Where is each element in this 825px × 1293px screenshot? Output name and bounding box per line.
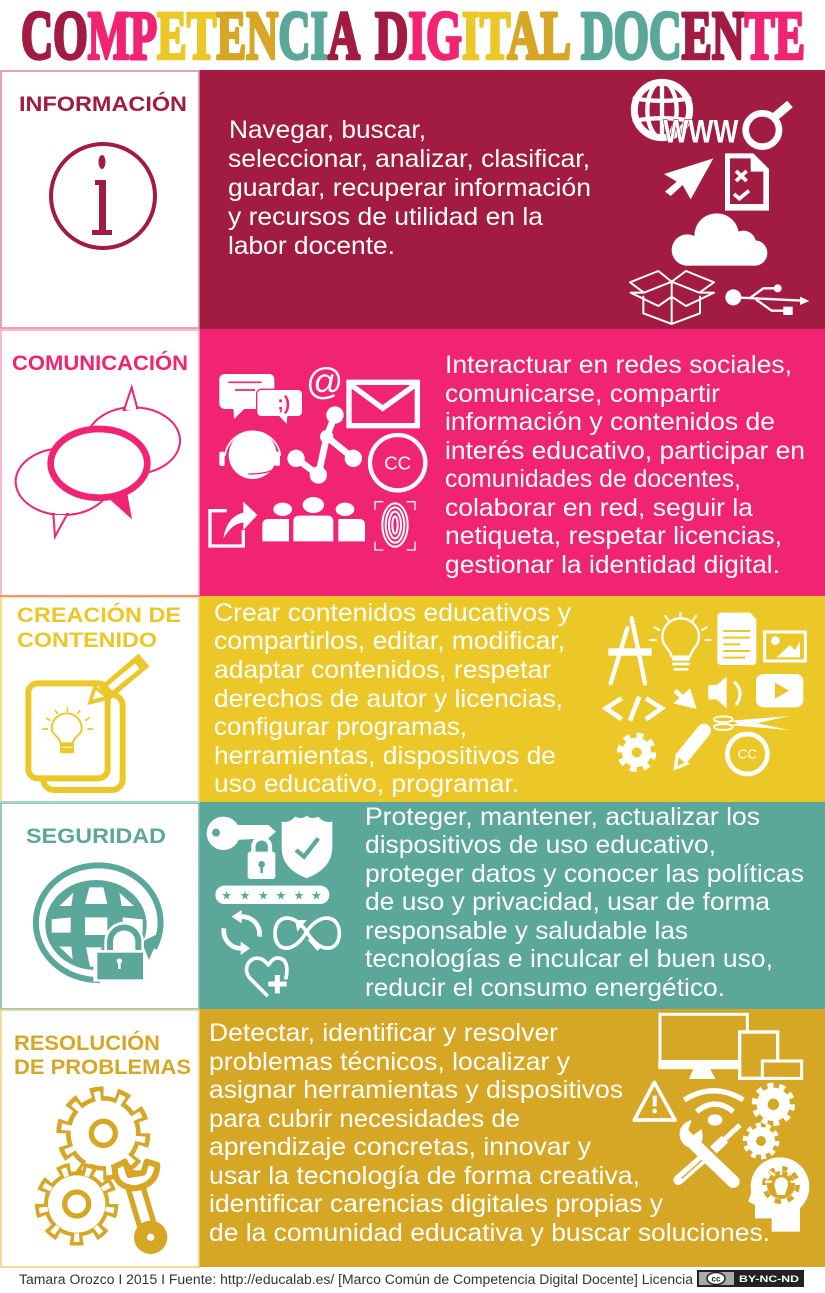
license badge: cc [712,1274,721,1284]
text: información [228,116,591,260]
footer credit: Tamara Orozco I 2015 I Fuente: http://educalab.es/ [Marco Común de Competencia Digital Docente] Licencia [19,1272,694,1287]
icon: notepad with pencil [28,660,144,790]
icon: globe with padlock [36,865,161,982]
heading: creación de contenido: CREACIÓN DE [17,602,181,627]
icons: resolución de problemas [634,1014,809,1232]
text: seguridad: tecnologías e inculcar el buen uso, [365,945,773,973]
icon: envelope [349,382,417,426]
text: resolución de problemas [209,1019,770,1247]
text: resolución de problemas: para cubrir necesidades de [209,1105,520,1133]
text: comunicación: comunidades de docentes, [445,465,741,493]
heading: comunicación: COMUNICACIÓN [12,350,188,375]
heading: resolución de problemas [14,1030,191,1079]
icon: gears [745,1086,792,1157]
icon: infinity [275,918,339,949]
icon: globe www [634,82,738,150]
text: creación de contenido [214,599,572,798]
license badge: BY-NC-ND [739,1274,800,1284]
icon: speech bubbles [16,387,180,537]
heading: seguridad: SEGURIDAD [26,824,166,848]
text: información: seleccionar, analizar, clasificar, [228,145,590,173]
icon: password: ★ [294,888,304,902]
text: comunicación: comunicarse, compartir [445,380,720,408]
icons: creación de contenido [606,613,805,774]
text: resolución de problemas: usar la tecnología de forma creativa, [209,1162,640,1190]
icon: monitor [658,1014,747,1079]
icon: sync arrows [224,910,260,955]
icon: password: ★ [311,888,322,902]
heading: resolución de problemas: DE PROBLEMAS [14,1055,191,1079]
icon: chat bubbles: ;) [277,393,290,414]
heading: información: INFORMACIÓN [19,91,187,116]
icon: arrow [673,688,697,709]
icon: creative commons: CC [738,747,757,762]
text: resolución de problemas: de la comunidad educativa y buscar soluciones. [209,1219,770,1247]
icon: scissors [714,716,789,730]
icons: comunicación [210,360,425,550]
text: comunicación: información y contenidos de [445,408,775,436]
license badge [697,1270,804,1287]
text: creación de contenido: compartirlos, editar, modificar, [214,627,565,655]
icon: phone [762,1061,802,1078]
panel: resolución de problemas [1,1009,825,1267]
icon: tablet [740,1032,778,1078]
icon: wifi [684,1091,743,1126]
icon: at sign: @ [306,360,343,402]
icon: people [262,497,365,541]
text: información: guardar, recuperar información [228,174,591,202]
title [21,0,805,74]
text: comunicación: netiqueta, respetar licencias, [445,522,782,550]
icon: box [630,271,714,324]
icon: speaker [708,677,740,708]
icon: headset [219,431,280,479]
text: resolución de problemas: asignar herramientas y dispositivos [209,1076,623,1104]
icon: text document [717,613,756,665]
icon: key [207,817,276,850]
icon: info circle [51,144,155,248]
text: creación de contenido: Crear contenidos educativos y [214,599,572,627]
text: seguridad [365,803,804,1002]
icon: password: ★ [276,888,286,902]
icon: document [725,153,769,211]
panel: comunicación [1,329,825,596]
icon: creative commons [727,734,767,774]
text: resolución de problemas: aprendizaje concretas, innovar y [209,1133,592,1161]
icon: tools [678,1120,740,1182]
icon: network [287,406,362,484]
text: seguridad: Proteger, mantener, actualizar los [365,803,760,831]
icon: share [210,502,257,546]
icon: creative commons: CC [384,452,411,473]
icon: magnifier [746,104,790,147]
icon: creative commons [370,435,425,490]
icon: password: ★ [258,888,269,902]
panel: información [1,70,825,329]
icon: usb [725,284,809,315]
text: comunicación: colaborar en red, seguir la [445,494,753,522]
icon: video play [756,674,803,707]
icon: password: ★ [240,888,250,902]
text: información: labor docente. [228,232,395,260]
icon: picture [765,632,805,661]
icon: warning [634,1082,675,1120]
panel: creación de contenido [0,596,825,802]
icon: chat bubbles [219,374,303,424]
icon: gears and wrench [40,1093,167,1254]
text: creación de contenido: adaptar contenidos, respetar [214,656,551,684]
icon: light bulb [650,613,711,669]
heading: creación de contenido: CONTENIDO [17,628,157,652]
text: resolución de problemas: problemas técnicos, localizar y [209,1048,571,1076]
text: seguridad: de uso y privacidad, usar de forma [365,888,770,916]
icon: code tag [606,697,662,721]
text: comunicación: Interactuar en redes sociales, [445,351,792,379]
text: comunicación [445,351,805,579]
icon: password [215,886,329,904]
text: creación de contenido: herramientas, dispositivos de [214,742,556,770]
icon: head with idea [748,1157,809,1232]
text: resolución de problemas: Detectar, identificar y resolver [209,1019,558,1047]
icons: información [630,82,809,324]
panel: seguridad [0,802,825,1009]
icon: fingerprint [375,502,415,550]
text: resolución de problemas: identificar carencias digitales propias y [209,1190,664,1218]
heading: resolución de problemas: RESOLUCIÓN [14,1030,160,1055]
text: información: Navegar, buscar, [229,116,426,144]
icon: password: ★ [221,888,232,902]
text: creación de contenido: derechos de autor y licencias, [214,685,563,713]
icon: gear [620,736,653,769]
text: comunicación: interés educativo, participar en [445,437,805,465]
text: creación de contenido: configurar programas, [214,713,467,741]
icon: pencil [673,731,704,771]
text: seguridad: responsable y saludable las [365,917,688,945]
text: información: y recursos de utilidad en la [228,203,543,231]
icon: globe www: WWW [663,113,738,150]
icon: heart plus [247,958,288,995]
icons: seguridad [207,816,339,995]
text: creación de contenido: uso educativo, programar. [214,770,519,798]
icon: shield [282,816,332,878]
icon: cloud [672,213,767,266]
icon: padlock [248,838,275,879]
text: comunicación: gestionar la identidad digital. [445,551,780,579]
icon: compass and ruler [608,618,652,683]
text: seguridad: reducir el consumo energético. [365,974,725,1002]
icon: cursor [664,158,713,199]
text: seguridad: proteger datos y conocer las políticas [365,860,804,888]
heading: creación de contenido [17,602,181,652]
text: seguridad: dispositivos de uso educativo, [365,831,716,859]
